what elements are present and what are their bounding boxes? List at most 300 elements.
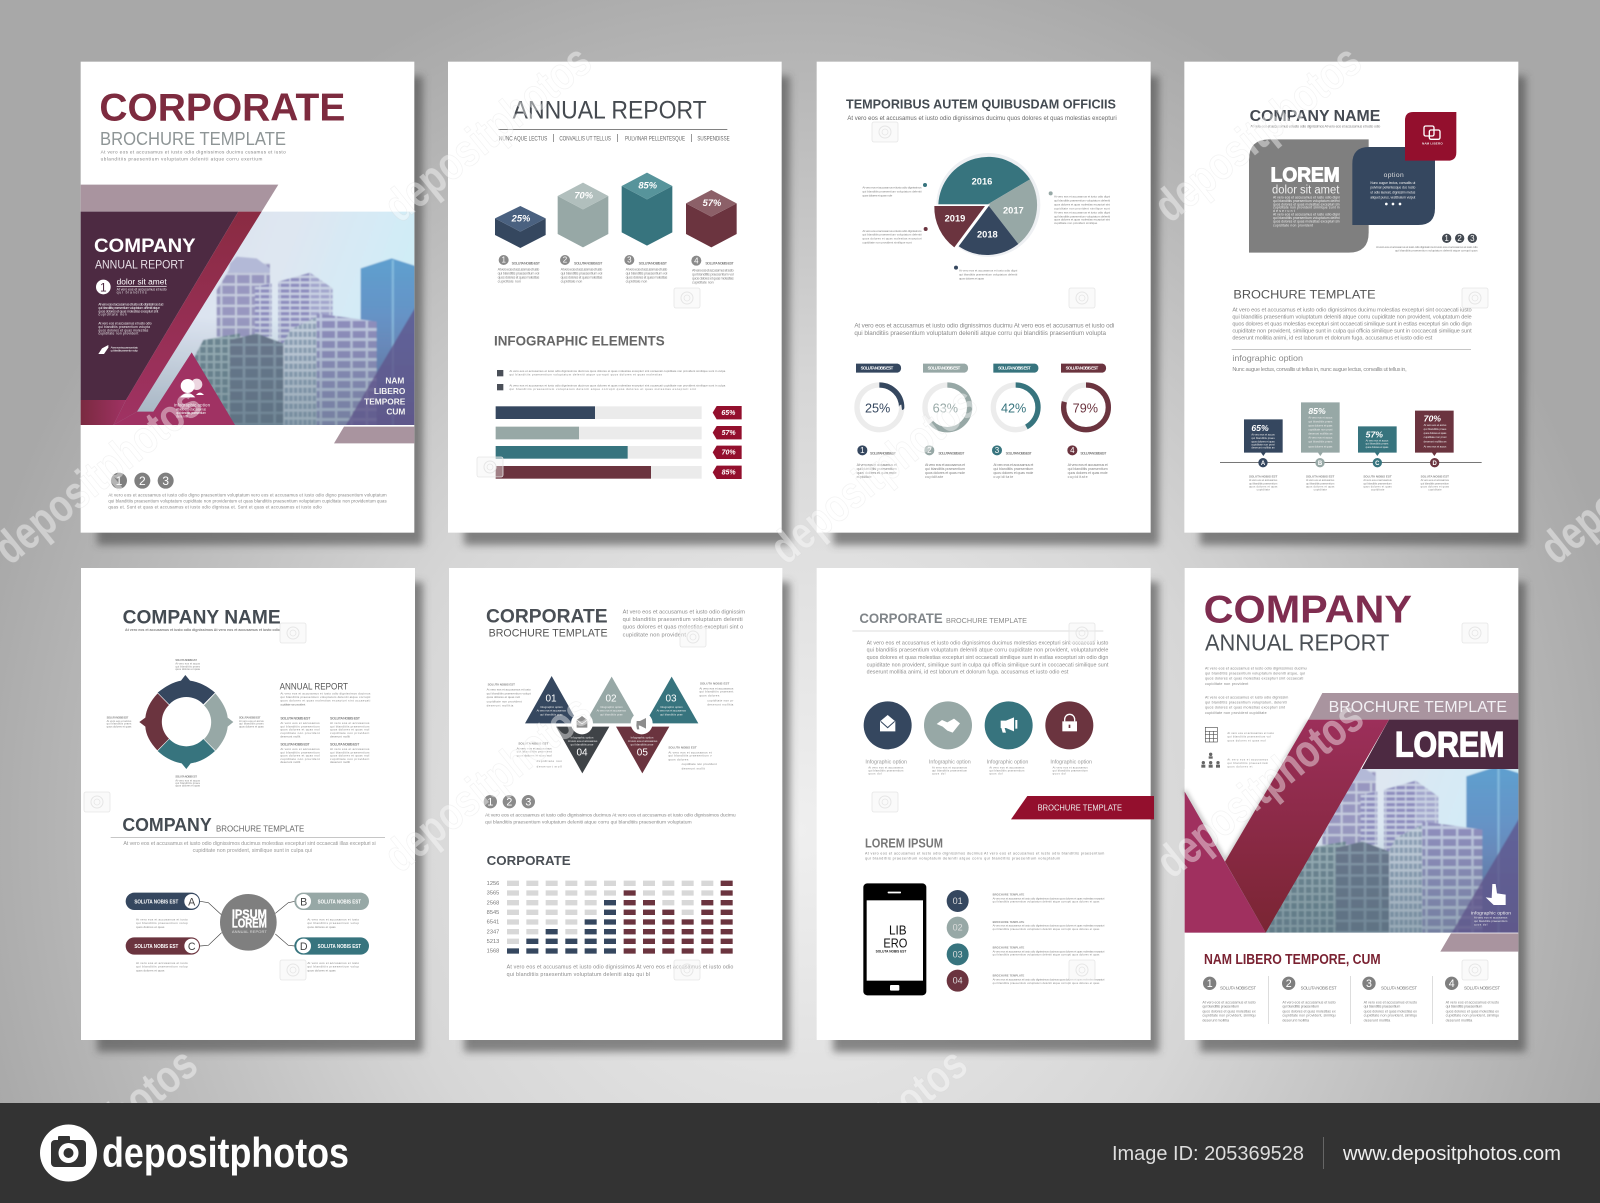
paragraph: At vero eos et accusamus et iusto odio dignissimos ducimus molestias excepturi sint occaecati iusto [867, 641, 1108, 647]
navigation labels: SUSPENDISSE [697, 136, 730, 143]
numbered columns: qui blanditiis praesentium [1364, 1005, 1400, 1009]
triangle 04: Infographic option [571, 735, 594, 739]
ring chart 63% [923, 364, 970, 430]
intro text: quos dolores et quas molestias excepturi sint [1205, 705, 1285, 709]
triangle 02: At vero eos et accusamus [597, 709, 627, 713]
cube captions: SOLUTA NOBIS EST [705, 262, 734, 266]
cube captions: SOLUTA NOBIS EST [639, 262, 668, 266]
paragraph: qui blanditiis praesentium voluptatum deleniti atque corru qui blanditiis praesentium voluptatum [485, 819, 692, 825]
timeline card A: deserunt mollitia an [1251, 446, 1275, 450]
intro text: qui blanditiis praesentium voluptatum, deleniti [1205, 700, 1287, 704]
pill notes: qui blanditiis praesentium volup [307, 965, 359, 969]
ring captions: qui blanditiis praesentium [993, 467, 1033, 471]
triangle text: At vero eos et accusamus [176, 408, 206, 412]
icon captions: quos dol [989, 771, 1003, 775]
numbered list: qui blanditiis praesentium voluptatum deleniti atque corrupti quos dolores et quas [993, 927, 1100, 931]
heading: BROCHURE TEMPLATE [946, 616, 1027, 625]
triangle notes: At vero eos et accusamus [517, 746, 552, 750]
band text: BROCHURE TEMPLATE [1329, 699, 1507, 716]
timeline captions: quos dolores et quas [1249, 485, 1278, 489]
intro text: quos dolores et quas molestias excepturi sint o [623, 625, 743, 631]
section heading: COMPANY [122, 814, 212, 835]
annual report block: At vero eos et accusamus [330, 721, 370, 725]
grey card text: cupiditate non provident similique sunt in [1273, 206, 1340, 210]
bullet list: qui blanditiis praesentium voluptatum deleniti atque corrupti quos dolores et quas molestias [509, 373, 662, 377]
numbered list: At vero eos et accusamus et iusto odio dignissimos ducimus quos dolores et quas molestias excepturi [993, 978, 1105, 982]
timeline captions: cupiditate [1257, 487, 1271, 491]
timeline card D: 70% [1424, 414, 1441, 424]
pie callouts: At vero eos et accusamus et iusto odio digni [1054, 194, 1110, 198]
triangle notes: SOLUTA NOBIS EST [700, 681, 730, 685]
timeline card C: quos dolores et quas [1366, 445, 1389, 449]
icon captions: quos dol [932, 771, 946, 775]
number badges: 2 [506, 796, 512, 808]
timeline card B [1301, 402, 1340, 467]
numbered list: BROCHURE TEMPLATE [993, 893, 1025, 897]
plum text [98, 303, 164, 336]
icon: padlock [1045, 701, 1093, 749]
dot-grid chart: 2347 [487, 929, 499, 935]
annual report block: quos dolores et quas mol [280, 728, 320, 732]
paragraph: qui blanditiis praesentium voluptatum deleniti atque corru qui blanditiis praesentium volupta [854, 330, 1106, 337]
cube captions: qui blanditiis praesentium vol [692, 272, 734, 276]
icon notes: At vero eos et accusamus et iusto [1227, 731, 1275, 735]
triangle notes: quos dolores [668, 757, 689, 761]
ring chart 79%: SOLUTA NOBIS EST [1066, 366, 1099, 371]
icon captions: At vero eos et accusamus [989, 765, 1025, 769]
cube captions: qui blanditiis praesentium vol [498, 272, 540, 276]
icon notes: qui blanditiis praesentium vol [1227, 735, 1271, 739]
lorem text: At vero eos et accusamus et iusto odio dignissimos ducimus At vero eos et accusamus et iusto odio blanditiis praesentium [865, 851, 1104, 855]
numbered columns: cupiditate non provident, similiqu [1446, 1014, 1499, 1018]
left triangle [1185, 792, 1266, 933]
ring captions: At vero eos et accusamus et [993, 463, 1033, 467]
triangle notes: cupiditate non pr [707, 698, 733, 702]
pill notes: At vero eos et accusamus et iusto [307, 918, 359, 922]
ring captions: 1 [860, 446, 865, 455]
timeline captions: qui blanditiis praesentium [1363, 481, 1392, 485]
photo caption: NAM [385, 375, 404, 385]
phone: SOLUTA NOBIS EST [876, 950, 907, 954]
numbered list: 03 [953, 949, 963, 959]
pie callouts: At vero eos et accusamus et iusto odio digni [1054, 210, 1110, 214]
pie chart [930, 153, 1040, 257]
pill notes: quos dolores et quas [136, 925, 165, 929]
cube captions: cupiditate non [626, 280, 647, 284]
triangle 01: Infographic option [540, 705, 563, 709]
icon: org chart [1201, 753, 1220, 768]
timeline captions: cupiditate [1371, 487, 1385, 491]
annual report block: SOLUTA NOBIS EST [280, 742, 310, 746]
pie chart: 2016 [972, 176, 992, 186]
pie callouts: qui blanditiis praesentium voluptatum deleniti [959, 273, 1018, 277]
footer text [108, 493, 387, 510]
cycle labels: qui blanditiis praes [175, 781, 201, 785]
timeline captions [1249, 474, 1450, 491]
numbered columns: quos dolores et quas molestias ex [1364, 1009, 1417, 1013]
heading: ANNUAL REPORT [513, 96, 707, 124]
triangle notes: deserunt mollitia [487, 704, 514, 708]
paragraph: At vero eos et accusamus et iusto odio dignissimos ducimus At vero eos et accusamus et iusto odio dignissimos ducimu [485, 813, 736, 819]
central hub: ANNUAL REPORT [232, 929, 267, 934]
icon captions: At vero eos et accusamus [868, 765, 904, 769]
numbered columns: deserunt mollitia [1282, 1018, 1310, 1022]
pie callouts: cupiditate non provident similique sunt [1054, 206, 1110, 210]
cube captions: cupiditate non [498, 280, 521, 284]
number badge: 1 [100, 280, 107, 294]
diagonal stripe [113, 212, 262, 425]
numbered columns: SOLUTA NOBIS EST [1464, 985, 1500, 990]
ring captions: SOLUTA NOBIS EST [870, 452, 897, 456]
bullet list: At vero eos et accusamus et iusto odio dignissimos ducimus quos dolores et quas molestias excepturi sint occaecati cupiditate non provident similique sunt in culpa [509, 383, 726, 387]
timeline card D: qui blanditiis praes [1424, 427, 1447, 431]
triangle 05: At vero eos et accusamus [628, 739, 658, 743]
photo stock watermarks: depositphotos [374, 684, 601, 882]
intro text: cupiditate non provident, [623, 632, 688, 638]
triangle 02: Infographic option [600, 705, 623, 709]
intro text: qui blanditiis praesentium voluptatum deleniti [623, 617, 743, 623]
ring captions: qui blanditiis praesentium [857, 467, 897, 471]
timeline card B: qui blanditiis praes [1308, 420, 1333, 424]
cycle labels: SOLUTA NOBIS EST [175, 658, 197, 662]
paragraph: At vero eos et accusamus et iusto odio dignissimos ducimus molestias excepturi sint occaecati illas excepturi si [123, 841, 376, 847]
annual report block: quos dolores et quas mol [330, 754, 370, 758]
ring captions: quos dolores et quas mole [925, 471, 965, 475]
mauve band [1308, 693, 1518, 720]
pill notes: quos dolores et quas [307, 969, 336, 973]
pill notes: quos dolores et quas [307, 925, 336, 929]
plum text: cupiditate non [98, 313, 127, 317]
cycle labels: At vero eos et accus [175, 662, 201, 666]
triangle 03: 03 [665, 693, 677, 704]
navigation labels: CONVALLIS UT TELLUS [559, 136, 611, 143]
annual report block: At vero eos et accusamus et iusto odio dignissimos ducimus [280, 692, 371, 696]
icon: envelope badge [571, 712, 593, 734]
dolor heading: At vero eos et accusamus et iusto [117, 287, 167, 291]
triangle notes: At vero eos et accusamus [699, 686, 734, 690]
ring captions: At vero eos et accusamus et [857, 463, 897, 467]
pie callouts: qui blanditiis praesentium voluptatum deleniti [1054, 198, 1110, 202]
annual report block: cupiditate non provident [330, 731, 369, 735]
numbered columns: 3 [1366, 978, 1372, 990]
triangle text [174, 403, 211, 418]
footer separator [1323, 1137, 1324, 1169]
navigation labels: NUNC AQUE LECTUS [499, 136, 548, 143]
ring captions: SOLUTA NOBIS EST [1080, 452, 1107, 456]
pill B: SOLUTA NOBIS EST [318, 899, 361, 905]
cube captions [498, 255, 734, 284]
numbered columns [1202, 976, 1500, 1024]
triangle notes: qui blanditiis praesentium v [668, 754, 712, 758]
timeline card B: deserunt mollitia an [1308, 432, 1333, 436]
intro text: ublanditiis praesentium voluptatum deleniti atque corru exertium [101, 156, 262, 161]
annual report block: deserunt mollit [280, 734, 300, 738]
grey card text: At vero eos et accusamus et iusto odio digni [1273, 196, 1340, 200]
numbered columns: qui blanditiis praesentium [1446, 1005, 1482, 1009]
pill D: SOLUTA NOBIS EST [318, 944, 361, 950]
grey card text: qui blanditiis praesentium voluptatum deleni [1273, 199, 1340, 203]
ring captions: SOLUTA NOBIS EST [1006, 452, 1032, 456]
small icon: At vero eos et accusamus et iusto [111, 346, 139, 350]
pill notes: qui blanditiis praesentium volup [136, 965, 188, 969]
pie callouts: qui blanditiis praesentium voluptatum deleniti [862, 233, 922, 237]
ring captions: At vero eos et accusamus et [925, 463, 965, 467]
pie callouts: quos dolores et quas [959, 277, 984, 281]
cycle labels: qui blanditiis praes [175, 664, 201, 668]
timeline captions: qui blanditiis praesentium [1306, 481, 1335, 485]
photo caption [1471, 910, 1511, 927]
panel: icons and phone page [817, 568, 1154, 1040]
intro text: qui blanditiis praesentium voluptatum deleniti atque, qui [1205, 672, 1305, 676]
mauve corner [1440, 933, 1518, 952]
lower heading: NAM LIBERO TEMPORE, CUM [1204, 952, 1381, 968]
plum text: cupiditate non provident [98, 332, 138, 336]
cube 85%: 85% [638, 181, 658, 191]
pill A: SOLUTA NOBIS EST [134, 899, 179, 905]
badge note: At vero eos et accusamus et iusto odio dignissimos At vero eos et accusamus et iusto odio [1376, 245, 1478, 249]
triangle notes: cupiditate non provident [682, 762, 717, 766]
numbered columns: qui blanditiis praesentium [1202, 1005, 1239, 1009]
heading note: At vero eos et accusamus et iusto odio dignissimos At vero eos et accusamus et iusto odio [1250, 125, 1380, 129]
icon notes: quos dolores et [1227, 764, 1253, 768]
pie callouts: quos dolores et quas molestias excepturi [862, 236, 922, 240]
camera watermarks [84, 122, 1488, 980]
cycle labels: quos dolores et quas [175, 667, 201, 671]
triangle notes: SOLUTA NOBIS EST [518, 741, 549, 745]
cycle labels: At vero eos et accus [175, 778, 201, 782]
pill notes: At vero eos et accusamus et iusto [136, 961, 188, 965]
icon captions: qui blanditiis praesentium [989, 768, 1025, 772]
pie callouts: At vero eos et accusamus et iusto odio digni [959, 269, 1018, 273]
timeline captions: At vero eos et accusamus [1363, 478, 1392, 482]
icon captions: At vero eos et accusamus [932, 765, 968, 769]
triangle 04 [556, 727, 609, 773]
ring captions: cupiditate [993, 475, 1013, 479]
triangle notes: quos dolores et quas mol [487, 695, 520, 699]
annual report block: cupiditate non provident [330, 757, 369, 761]
cycle labels: At vero eos et accus [107, 719, 132, 723]
annual report block: ANNUAL REPORT [280, 681, 348, 691]
pie callouts: quos dolores et quas molestias excepturi sint [1054, 202, 1110, 206]
number badges: 1 [487, 796, 493, 808]
pie callouts: cupiditate non provident similique sunt [862, 240, 912, 244]
pill notes: quos dolores et quas [136, 969, 165, 973]
divider [111, 836, 385, 839]
badge note: qui blanditiis praesentium voluptatum deleniti atque corrupti quos [1395, 249, 1478, 253]
pill C [126, 937, 200, 955]
dot-grid chart: 2568 [487, 900, 499, 906]
numbered columns: cupiditate non provident, similiqu [1364, 1014, 1417, 1018]
pie callouts: quos dolores et quas molestias excepturi sint [1054, 218, 1110, 222]
divider [852, 630, 1103, 632]
photo stock watermarks: depositphotos [1146, 690, 1373, 888]
timeline card C: qui blanditiis praes [1366, 442, 1389, 446]
triangle 03: Infographic option [660, 705, 683, 709]
numbered columns: At vero eos et accusamus et iusto [1202, 1001, 1256, 1005]
triangle text: qui blanditiis praesentium [176, 411, 206, 415]
triangle 01: 01 [545, 693, 557, 704]
photo stock watermarks: depositphotos [760, 376, 987, 574]
dot-grid chart: 1568 [487, 949, 499, 955]
timeline card B: At vero eos et accus [1308, 416, 1333, 420]
triangle text: infographic option [174, 403, 211, 408]
photo caption: infographic option [1471, 910, 1511, 916]
numbered columns: SOLUTA NOBIS EST [1220, 985, 1256, 990]
subsection [1232, 353, 1407, 373]
ring chart 42%: SOLUTA NOBIS EST [998, 366, 1031, 371]
panel: company name page [1184, 62, 1518, 533]
triangle 04: qui blanditiis prae [571, 743, 594, 747]
plum band [1362, 720, 1518, 769]
photo caption [364, 375, 406, 416]
heading note: At vero eos et accusamus et iusto odio dignissimos At vero eos et accusamus et iusto odio [125, 628, 281, 632]
mauve corner [334, 427, 414, 443]
timeline captions: At vero eos et accusamus [1306, 478, 1335, 482]
timeline card D: deserunt mollitia an [1424, 440, 1447, 444]
numbered list: qui blanditiis praesentium voluptatum deleniti atque corrupti quos dolores et quas [993, 953, 1100, 957]
pie chart: 2019 [945, 214, 965, 224]
intro text: At vero eos et accusamus et iusto odio dignissimos ducimu [1205, 667, 1307, 671]
intro text: At vero eos et accusamus et iusto odio dignissim [623, 609, 745, 615]
mauve band [81, 185, 278, 212]
phone: ERO [883, 937, 907, 951]
section heading: CORPORATE [487, 853, 571, 868]
triangle notes: deserunt mollitia [707, 702, 734, 706]
timeline card A: cupiditate non provi [1251, 443, 1275, 447]
annual report block: At vero eos et accusamus [280, 747, 320, 751]
cube captions: At vero eos et accusamus et iusto [692, 268, 734, 272]
triangle notes: At vero eos et accusamus et iusto [487, 688, 531, 692]
annual report block: quos dolores et quas mol [280, 754, 320, 758]
central hub: IPSUM [232, 908, 267, 922]
paragraph: quos dolores et quas molestias excepturi sint occaecati similique sunt in estlas excepturi sin odio dign [1232, 321, 1472, 327]
ring chart 79%: 79% [1073, 401, 1098, 415]
cube captions: quos dolores et quas molestias [692, 276, 734, 280]
cube 70% [558, 183, 608, 247]
cube captions: At vero eos et accusamus et iusto [626, 268, 667, 272]
triangle 02 [585, 677, 638, 723]
ring chart 63%: 63% [933, 401, 958, 415]
magenta triangle [113, 352, 235, 425]
ring captions: quos dolores et quas mole [1068, 471, 1108, 475]
intro text: cupiditate non provident [1205, 682, 1248, 686]
number badge [96, 280, 111, 294]
navigation labels [498, 129, 730, 143]
triangle 05: Infographic option [631, 735, 654, 739]
timeline captions: quos dolores et quas [1363, 485, 1392, 489]
timeline card B: quos dolores et quas [1308, 444, 1333, 448]
cube 25%: 25% [511, 214, 531, 224]
annual report block: deserunt mollit [330, 734, 350, 738]
numbered columns: 1 [1207, 978, 1213, 990]
ring captions: 2 [927, 446, 932, 455]
badge note [1376, 245, 1478, 253]
footer url: www.depositphotos.com [1342, 1143, 1561, 1165]
icon captions: qui blanditiis praesentium [1053, 768, 1088, 772]
annual report block: SOLUTA NOBIS EST [280, 717, 311, 721]
triangle notes: deserunt moll [537, 764, 562, 768]
numbered list: 02 [953, 923, 963, 933]
footer text: At vero eos et accusamus et iusto odio digno praesentium voluptatum vero eos et accusamus et iusto odio digno praesentium voluptatum [108, 493, 387, 498]
panel: triangles and grid page [449, 568, 782, 1040]
lorem text [865, 851, 1104, 861]
icon notes: At vero eos et accusamus [1227, 758, 1269, 762]
number badges: 2 [139, 474, 146, 488]
number badges [1442, 234, 1477, 243]
dot-grid chart: 5213 [487, 939, 499, 945]
divider [1232, 348, 1471, 351]
navigation labels: PULVINAR PELLENTESQUE [625, 136, 685, 143]
navy card text: ut odio laoreet, dignissim metus [1370, 190, 1416, 194]
subtitle: BROCHURE TEMPLATE [100, 128, 286, 149]
percentage tags: 65% [721, 410, 736, 417]
ring chart 63%: SOLUTA NOBIS EST [928, 366, 961, 371]
city photo [1186, 769, 1518, 933]
number badges: 3 [1470, 234, 1475, 243]
cycle labels: quos dolores et quas [107, 724, 132, 728]
heading: CORPORATE [859, 610, 943, 626]
timeline card A: quos dolores et quas [1251, 439, 1275, 443]
pill notes: qui blanditiis praesentium volup [307, 921, 359, 925]
intro text: cupiditate non provident cupiditate [1205, 711, 1267, 715]
intro text: At vero eos et accusamus et iusto odio dignissim [1205, 696, 1288, 700]
icon: calculator [1205, 727, 1217, 742]
timeline captions: SOLUTA NOBIS EST [1306, 474, 1335, 478]
icon: megaphone badge [631, 712, 653, 734]
pill notes [136, 918, 359, 973]
cycle labels: At vero eos et accus [239, 719, 264, 723]
panel: cycle diagram page [81, 568, 415, 1040]
pill notes: qui blanditiis praesentium volup [136, 921, 188, 925]
central hub: LOREM [232, 917, 267, 931]
timeline captions: At vero eos et accusamus [1249, 478, 1278, 482]
triangle 02: qui blanditiis prae [600, 712, 623, 716]
annual report block: SOLUTA NOBIS EST [330, 717, 361, 721]
plum text: quos dolores et quas molestias excepturi sint [98, 309, 158, 313]
subsection: Nunc augue lectus, convallis ut tellus in, nunc augue lectus, convallis ut tellus in, [1232, 367, 1407, 373]
icon notes: qui blanditiis praesentium [1227, 761, 1269, 765]
diagonal stripe [1225, 720, 1389, 933]
timeline card C: C [1375, 461, 1380, 467]
cube 70%: 70% [574, 190, 594, 200]
icon notes: quos dolores et quas mol [1227, 738, 1266, 742]
grey card text: quos dolores et quas molestias excepturi sin [1273, 219, 1340, 223]
lorem wordmark: LOREM [1395, 726, 1504, 765]
timeline captions: At vero eos et accusamus [1421, 478, 1450, 482]
numbered columns: qui blanditiis praesentium [1282, 1005, 1319, 1009]
cube captions: At vero eos et accusamus et iusto [561, 268, 602, 272]
cycle labels: qui blanditiis praes [239, 722, 264, 726]
numbered columns: deserunt mollitia [1202, 1018, 1230, 1022]
pie callouts: At vero eos et accusamus et iusto odio dignissimos [862, 185, 922, 189]
number badges: 1 [116, 474, 123, 488]
pie chart: 2017 [1003, 205, 1024, 215]
timeline card C: At vero eos et accus [1366, 438, 1389, 442]
navy card text: pulvinar pellentesque dui. Iusto [1370, 186, 1415, 190]
triangle 03 [645, 677, 698, 723]
ring chart 25%: 25% [865, 401, 890, 415]
logo icon: NAM LIBERO [1422, 142, 1443, 146]
grey card text: cupiditate non provident [1273, 224, 1313, 228]
triangle text: deleniti [176, 414, 188, 418]
panel: corporate brochure cover [81, 62, 418, 533]
paragraph: cupiditate non provident, similique sunt in culpa qui officia similique sunt in coccaecati similique sunt [1232, 329, 1472, 335]
icon captions: quos dol [1053, 771, 1066, 775]
timeline card A: 65% [1251, 423, 1269, 433]
triangle 01: At vero eos et accusamus [537, 709, 567, 713]
grey card text: At vero eos et accusamus et iusto odio digni [1273, 213, 1340, 217]
annual report block: cupiditate non provident [280, 731, 320, 735]
